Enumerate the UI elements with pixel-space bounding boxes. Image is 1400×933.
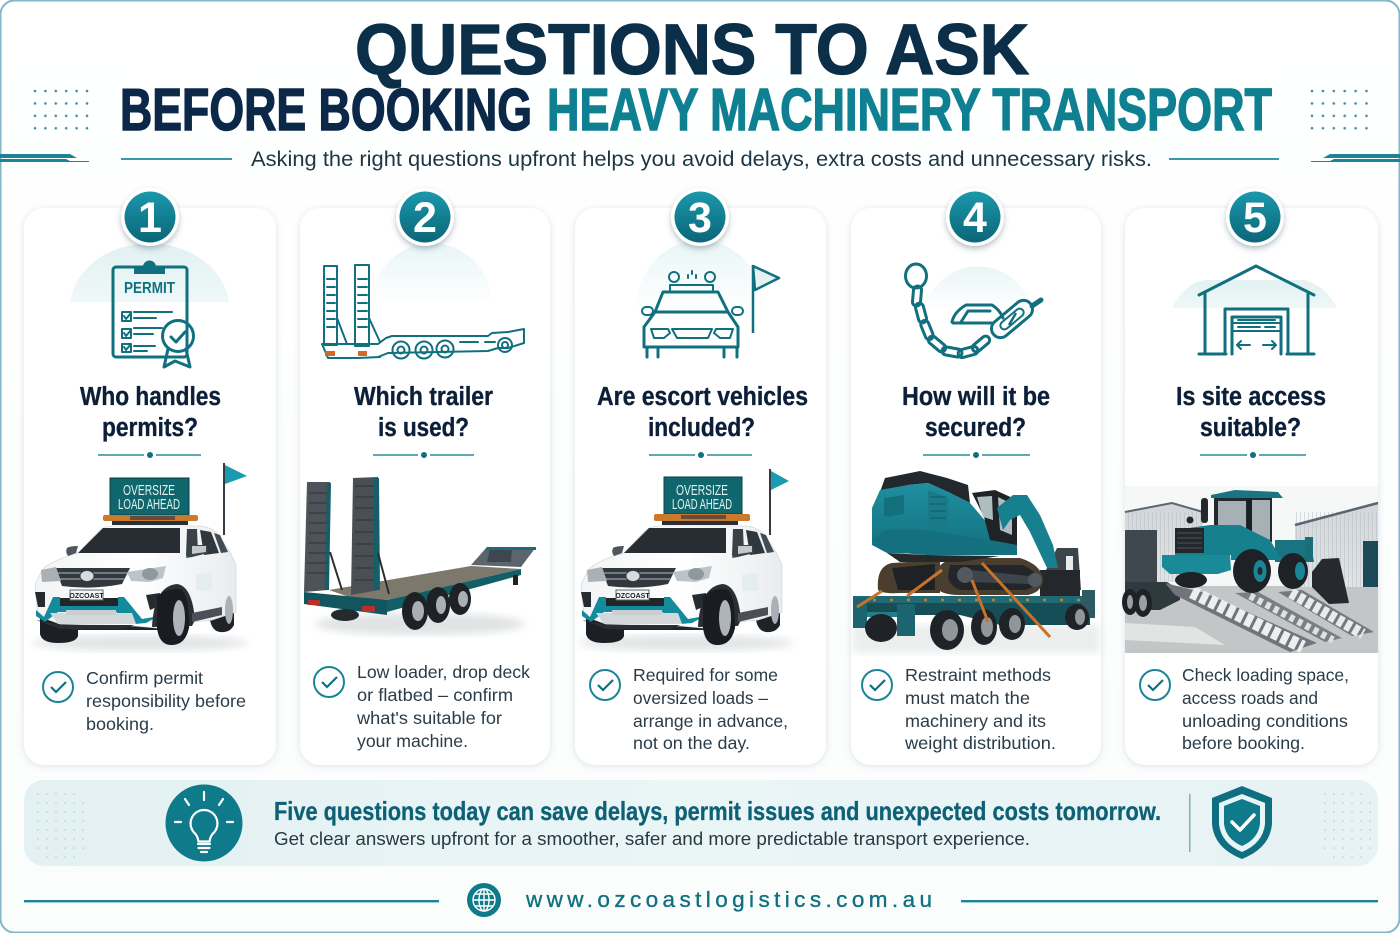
text block: your machine.: [357, 731, 468, 751]
text block: [1182, 665, 1349, 753]
icon: permit clipboard: [113, 260, 194, 367]
heading: [80, 383, 221, 442]
number badge 3: 3: [688, 194, 712, 242]
text block: not on the day.: [633, 733, 750, 753]
photo: escort vehicle: [578, 469, 794, 651]
icon: light bulb: [166, 784, 242, 862]
heading: Who handles: [80, 383, 221, 411]
photo: escort vehicle: LOAD AHEAD: [118, 497, 180, 513]
heading: [354, 383, 493, 442]
icon: permit clipboard: PERMIT: [124, 280, 175, 297]
icon: shield: [1212, 786, 1272, 859]
text block: access roads and: [1182, 688, 1318, 708]
heading: suitable?: [1200, 414, 1301, 442]
subtitle: Asking the right questions upfront helps you avoid delays, extra costs and unnecessary risks.: [251, 148, 1152, 171]
text block: before booking.: [1182, 733, 1305, 753]
text block: machinery and its: [905, 711, 1046, 731]
text block: [356, 662, 530, 751]
text block: must match the: [905, 688, 1030, 708]
photo: escort vehicle: OVERSIZE: [676, 483, 728, 499]
text block: Required for some: [633, 665, 778, 685]
text block: [633, 665, 788, 753]
photo: escort vehicle: [32, 463, 248, 651]
text block: unloading conditions: [1182, 711, 1348, 731]
text block: responsibility before: [86, 691, 246, 711]
heading: is used?: [378, 414, 469, 442]
check icon: [1140, 670, 1170, 700]
text block: weight distribution.: [904, 733, 1056, 753]
photo: escort vehicle: LOAD AHEAD: [672, 497, 732, 513]
text block: [904, 665, 1056, 753]
check icon: [590, 670, 620, 700]
panel: how will it be secured: [851, 188, 1101, 765]
callout band: [24, 780, 1378, 866]
heading: permits?: [102, 414, 198, 442]
check icon: [862, 670, 892, 700]
number badge 5: 5: [1243, 194, 1267, 242]
photo: escort vehicle: OZCOAST: [615, 593, 650, 600]
text block: Restraint methods: [905, 665, 1051, 685]
text block: or flatbed – confirm: [357, 685, 513, 705]
number badge 2: 2: [413, 194, 437, 242]
number badge 3: [671, 188, 729, 246]
heading: Is site access: [1176, 383, 1326, 411]
text block: Check loading space,: [1182, 665, 1349, 685]
heading: included?: [648, 414, 755, 442]
callout heading: Five questions today can save delays, permit issues and unexpected costs tomorrow.: [274, 796, 1161, 826]
heading: [902, 383, 1050, 442]
text block: arrange in advance,: [633, 711, 788, 731]
number badge 5: [1226, 188, 1284, 246]
heading: How will it be: [902, 383, 1050, 411]
panel: are escort vehicles included: [575, 188, 826, 765]
website address: www.ozcoastlogistics.com.au: [525, 887, 932, 912]
photo: excavator on trailer: [853, 471, 1100, 653]
text block: Low loader, drop deck: [357, 662, 530, 682]
panel: which trailer is used: [300, 188, 550, 765]
number badge 4: 4: [963, 194, 987, 242]
title: [120, 11, 1272, 143]
photo: escort vehicle: OZCOAST: [69, 593, 104, 600]
text block: what's suitable for: [356, 708, 502, 728]
icon: warehouse with roller door: [1199, 266, 1314, 354]
photo: low loader trailer: [304, 477, 536, 635]
heading: Which trailer: [354, 383, 493, 411]
icon: globe: [467, 883, 501, 917]
heading: [597, 383, 808, 442]
photo: wheel loader on ramps: [1122, 486, 1378, 653]
icon: low loader trailer: [322, 265, 524, 358]
text block: oversized loads –: [633, 688, 768, 708]
panel: who handles permits: [24, 188, 276, 765]
title: BEFORE BOOKING: [120, 77, 532, 143]
panel: is site access suitable: [1122, 188, 1378, 765]
icon: chain and hook: [906, 264, 1041, 358]
number badge 2: [396, 188, 454, 246]
callout text: Get clear answers upfront for a smoother, safer and more predictable transport experience.: [274, 829, 1030, 849]
text block: [86, 668, 246, 734]
number badge 1: [121, 188, 179, 246]
footer: [24, 883, 1378, 917]
icon: escort car: [642, 265, 779, 357]
title: QUESTIONS TO ASK: [355, 11, 1029, 90]
heading: secured?: [925, 414, 1026, 442]
photo: escort vehicle: OVERSIZE: [123, 483, 175, 499]
heading: [1176, 383, 1326, 442]
check icon: [43, 672, 73, 702]
number badge 4: [946, 188, 1004, 246]
text block: booking.: [86, 714, 154, 734]
number badge 1: 1: [138, 194, 162, 242]
heading: Are escort vehicles: [597, 383, 808, 411]
check icon: [314, 667, 344, 697]
text block: Confirm permit: [86, 668, 203, 688]
